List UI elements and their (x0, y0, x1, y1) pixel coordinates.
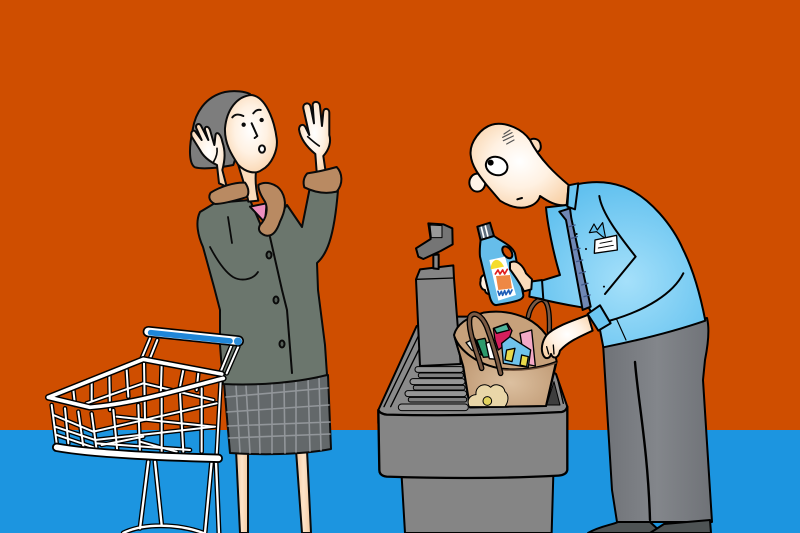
pedestal (402, 475, 553, 533)
shopping bag (454, 299, 557, 407)
face (225, 95, 277, 172)
right fur cuff (304, 167, 341, 193)
cart handle supports (142, 338, 238, 373)
scanner head (416, 223, 453, 269)
background: blue floor (0, 430, 800, 533)
cart basket wire mesh (52, 362, 221, 455)
checkout counter (378, 223, 567, 533)
right hand (299, 102, 330, 172)
head (471, 124, 569, 208)
bag body (454, 312, 557, 407)
shirt sleeve end at bottle hand (529, 280, 543, 299)
hand reaching into bag (542, 315, 593, 358)
left hand (191, 124, 227, 187)
bag back handle (528, 299, 549, 332)
cart blue handle (148, 332, 242, 345)
fur collar (258, 183, 285, 236)
blouse (250, 203, 267, 223)
woman coat (197, 187, 338, 385)
far ear (469, 174, 485, 192)
near ear (528, 139, 541, 152)
woman shopper (190, 91, 341, 533)
name badge (589, 223, 617, 253)
hand fingers behind bottle (480, 274, 493, 294)
detergent bottle (477, 223, 523, 305)
woman head, hands and collar (190, 91, 341, 236)
necktie (559, 208, 591, 310)
bag flower (468, 385, 508, 407)
neck (238, 165, 258, 202)
tray interior (378, 317, 567, 423)
cashier upper body (469, 124, 705, 347)
bag front panel (455, 337, 556, 407)
bag contents (466, 323, 535, 367)
cashier hand holding bottle (477, 223, 593, 358)
conveyor rollers (398, 367, 468, 411)
woman legs (236, 450, 311, 533)
cart wheels frame and legs (123, 462, 219, 533)
cashier trousers (603, 318, 712, 522)
cashier shoes (588, 520, 711, 533)
counter front (378, 407, 567, 478)
shirt (531, 182, 705, 347)
cart basket rims (48, 359, 223, 458)
scanner column (416, 265, 461, 366)
shirt cuff (588, 305, 611, 331)
woman skirt (224, 375, 331, 454)
bag front handle (469, 314, 501, 373)
hand thumb (510, 262, 532, 291)
shopping cart (48, 332, 242, 533)
left fur cuff (209, 183, 248, 204)
headscarf (190, 91, 253, 168)
